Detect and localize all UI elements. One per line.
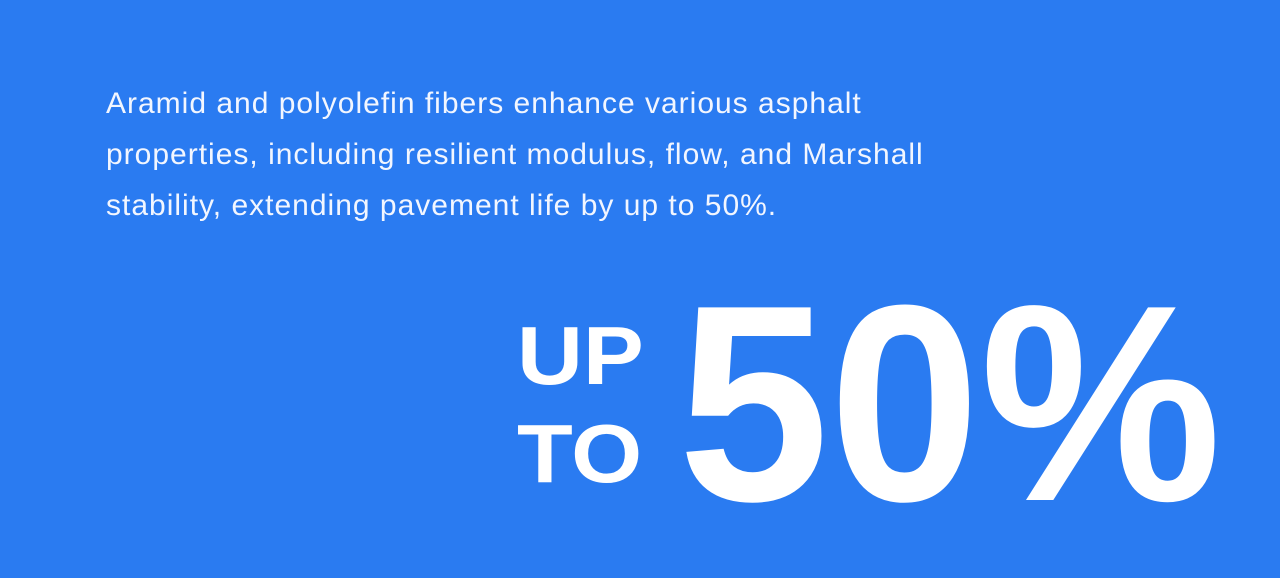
label: up to <box>517 309 644 500</box>
description text <box>106 87 924 222</box>
description text: Aramid and polyolefin fibers enhance various asphalt <box>106 87 862 120</box>
description text: properties, including resilient modulus, flow, and Marshall <box>106 138 924 171</box>
label: up to: TO <box>517 407 642 500</box>
big number: 50%: 50% <box>678 248 1222 560</box>
description text: stability, extending pavement life by up to 50%. <box>106 189 777 222</box>
label: up to: UP <box>517 309 644 402</box>
